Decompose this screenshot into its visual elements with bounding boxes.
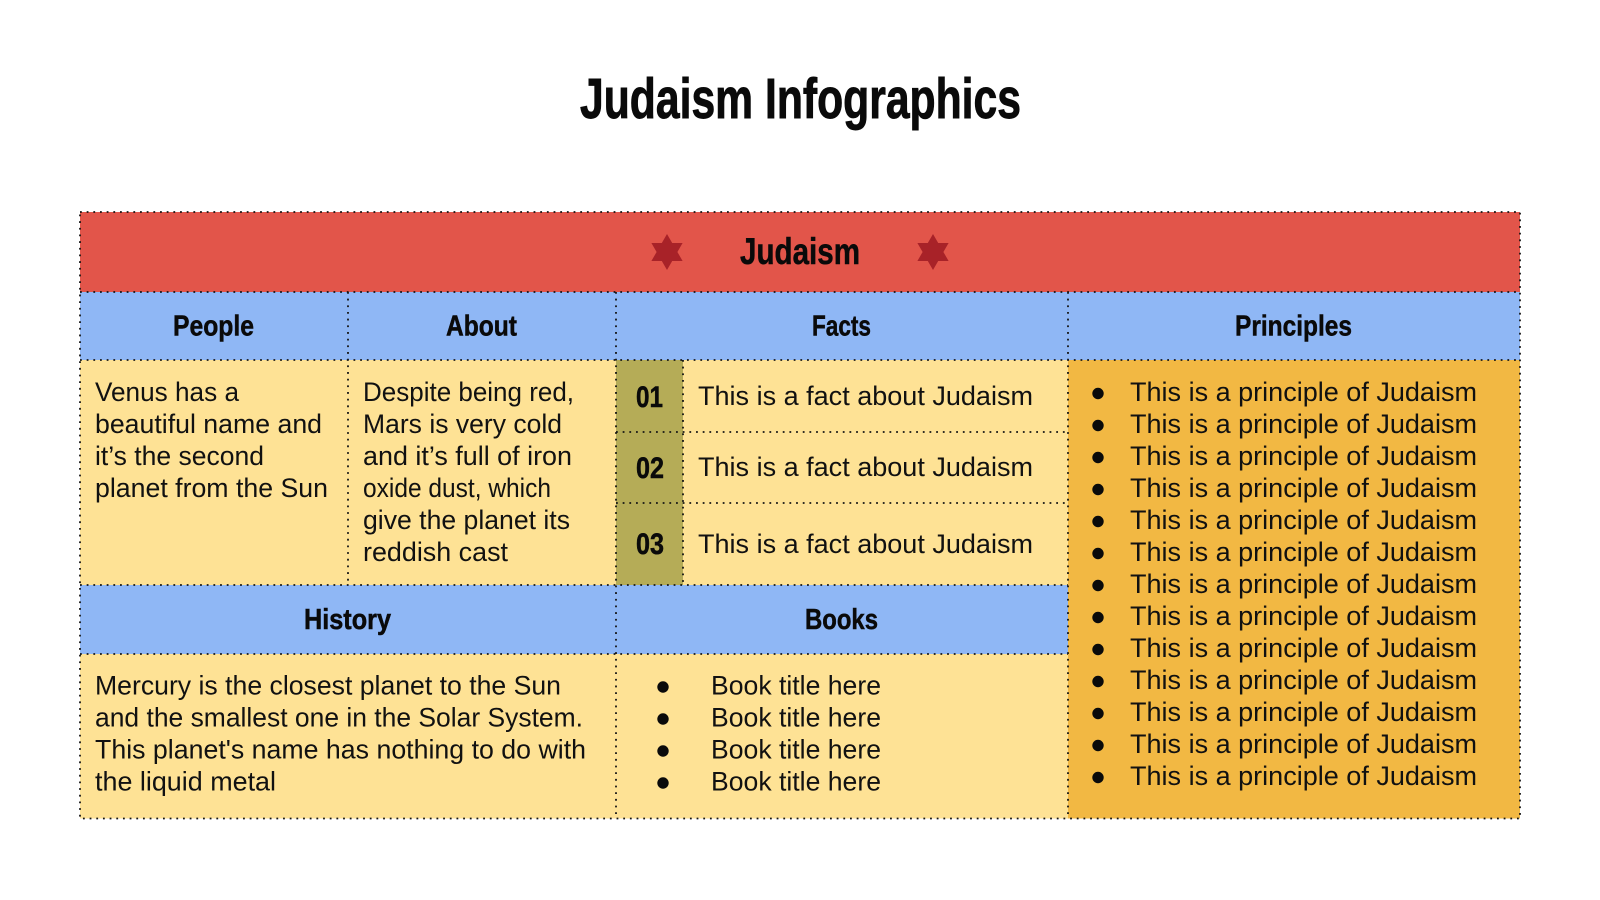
text: History body: the liquid metal <box>95 766 276 796</box>
heading: Judaism: Judaism <box>740 231 860 272</box>
list: principles: This is a principle of Judaism <box>1130 505 1477 535</box>
list: books: Book title here <box>711 670 881 700</box>
panel: Principles <box>1068 292 1520 818</box>
text: About body: Mars is very cold <box>363 409 562 439</box>
text: People body: Venus has a <box>95 377 240 407</box>
text: About body: reddish cast <box>363 537 508 567</box>
panel: About <box>348 292 616 585</box>
panel: People <box>80 292 348 585</box>
text: About body: and it’s full of iron <box>363 441 572 471</box>
panel: Judaism header <box>80 212 1520 292</box>
fact 02: 02 <box>636 452 664 485</box>
list: principles: This is a principle of Judaism <box>1130 473 1477 503</box>
fact 01: This is a fact about Judaism <box>698 381 1033 411</box>
list: principles: This is a principle of Judaism <box>1130 729 1477 759</box>
icon: left star <box>651 234 683 270</box>
text: People body: beautiful name and <box>95 409 322 439</box>
list: books: Book title here <box>711 766 881 796</box>
list: books: Book title here <box>711 702 881 732</box>
text: History body: Mercury is the closest planet to the Sun <box>95 670 561 700</box>
list: books <box>657 670 881 796</box>
fact 02: This is a fact about Judaism <box>698 452 1033 482</box>
list: principles: This is a principle of Judaism <box>1130 633 1477 663</box>
list: books: Book title here <box>711 734 881 764</box>
panel: Books <box>616 585 1068 818</box>
panel: History <box>80 585 616 818</box>
text: About body: oxide dust, which <box>363 473 551 503</box>
list: principles: This is a principle of Judaism <box>1130 697 1477 727</box>
text: About body: Despite being red, <box>363 377 574 407</box>
text: History body: This planet's name has nothing to do with <box>95 734 586 764</box>
list: principles <box>1092 377 1477 791</box>
text: About body <box>363 377 574 567</box>
fact 03: 03 <box>636 528 664 561</box>
list: principles: This is a principle of Judaism <box>1130 569 1477 599</box>
heading: About: About <box>446 310 517 342</box>
text: People body <box>95 377 328 503</box>
heading: Books: Books <box>805 604 878 636</box>
list: principles: This is a principle of Judaism <box>1130 409 1477 439</box>
list: principles: This is a principle of Judaism <box>1130 665 1477 695</box>
text: About body: give the planet its <box>363 505 570 535</box>
title: Judaism Infographics <box>580 67 1021 131</box>
text: People body: it’s the second <box>95 441 264 471</box>
heading: People: People <box>173 310 254 342</box>
list: principles: This is a principle of Judaism <box>1130 537 1477 567</box>
panel: Facts <box>616 292 1068 585</box>
text: History body <box>95 670 586 796</box>
icon: right star <box>917 234 949 270</box>
heading: History: History <box>304 604 391 636</box>
text: People body: planet from the Sun <box>95 473 328 503</box>
list: principles: This is a principle of Judaism <box>1130 441 1477 471</box>
heading: Facts: Facts <box>812 310 871 342</box>
text: History body: and the smallest one in the Solar System. <box>95 702 583 732</box>
table <box>80 212 1520 818</box>
fact 03: This is a fact about Judaism <box>698 529 1033 559</box>
fact 01: 01 <box>636 381 663 414</box>
heading: Principles: Principles <box>1235 310 1352 342</box>
list: principles: This is a principle of Judaism <box>1130 601 1477 631</box>
list: principles: This is a principle of Judaism <box>1130 761 1477 791</box>
list: principles: This is a principle of Judaism <box>1130 377 1477 407</box>
